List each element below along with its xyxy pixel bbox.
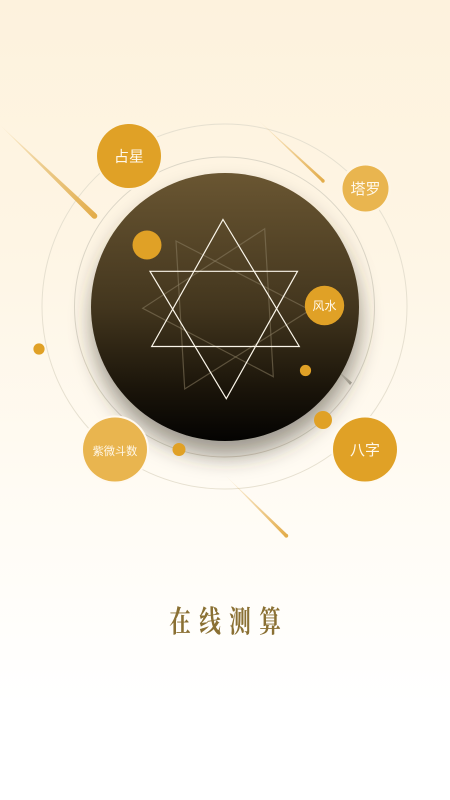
central dark disc: [91, 173, 359, 441]
badge: 紫微斗数: 紫微斗数: [93, 444, 137, 458]
badge: 塔罗: [342, 166, 388, 212]
dot on disc: large: [132, 230, 162, 260]
badge: 风水: 风水: [312, 299, 337, 313]
meteor streak: upper right: [258, 120, 325, 183]
badge: 紫微斗数: [83, 418, 147, 482]
dot: lower right: [314, 411, 332, 429]
badge: 八字: [333, 418, 397, 482]
title: 在线测算: [169, 606, 281, 639]
badge: 八字: 八字: [350, 442, 380, 459]
dot: bottom: [172, 443, 186, 456]
dot: left outer: [33, 343, 45, 355]
dot on disc: small: [300, 365, 311, 376]
badge: 占星: [97, 124, 161, 188]
white hexagram: [150, 220, 299, 399]
badge: 塔罗: 塔罗: [350, 181, 381, 198]
meteor streak: bottom: [225, 475, 288, 538]
disc shadow: [92, 188, 360, 456]
meteor streak: grey near disc: [335, 368, 352, 385]
orbit ring: outer: [42, 124, 407, 489]
meteor streak: upper left: [0, 125, 97, 219]
orbit ring: inner: [74, 157, 374, 457]
faint rotated hexagram: [143, 229, 310, 389]
badge: 占星: 占星: [114, 148, 144, 166]
badge: 风水: [305, 286, 344, 325]
